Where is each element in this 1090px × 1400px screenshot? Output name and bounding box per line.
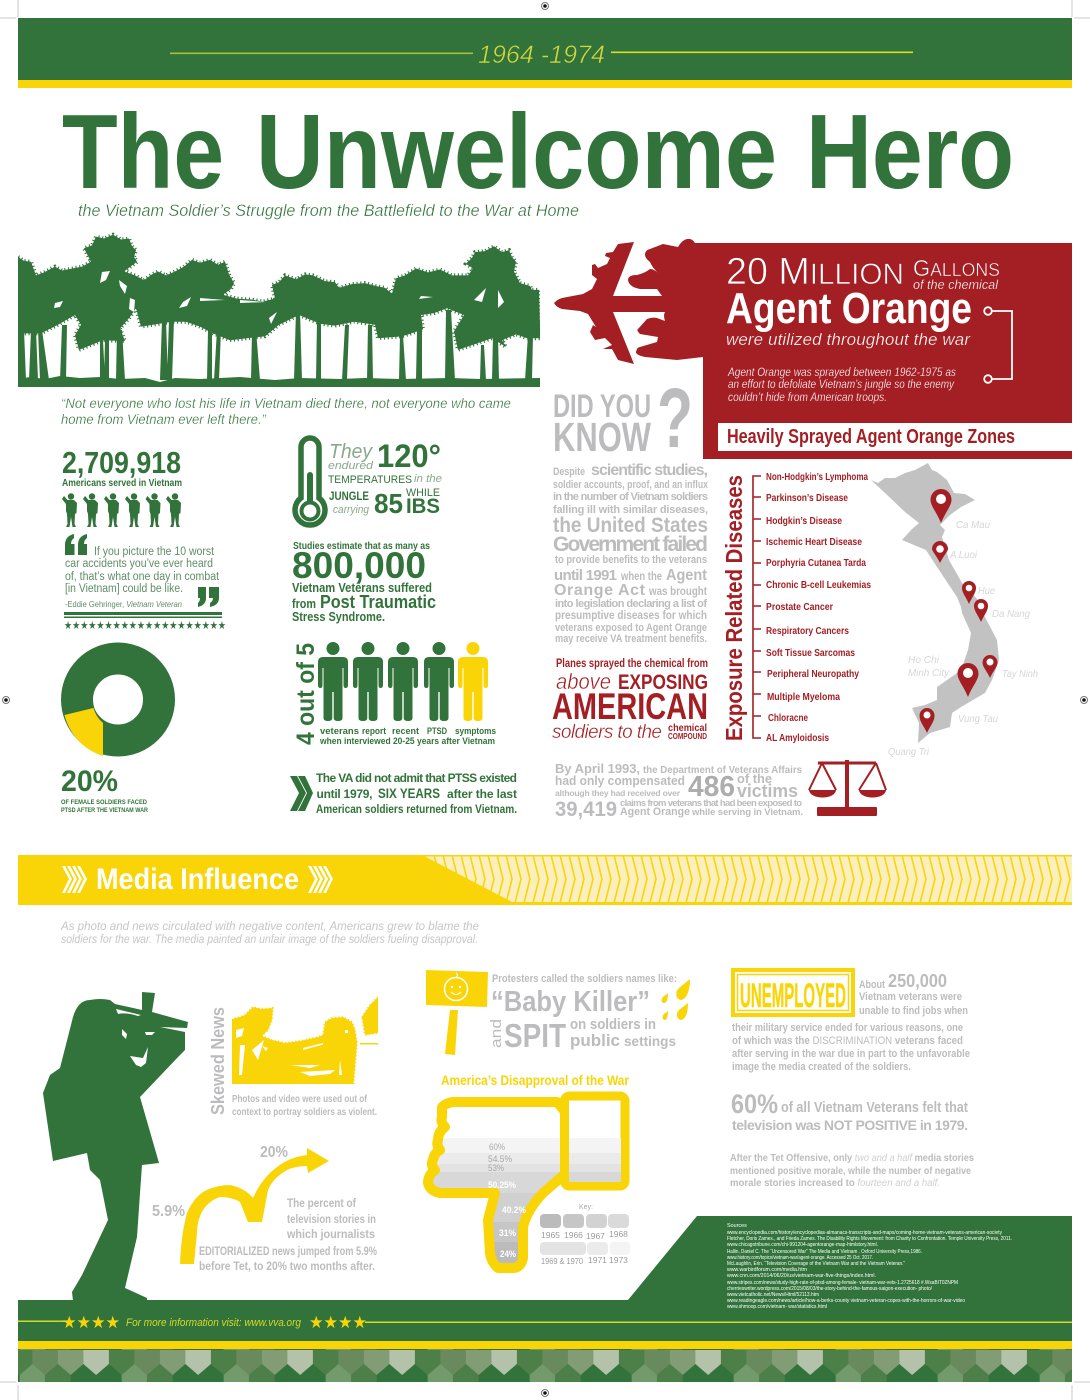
60 percent stat: 60% (731, 1089, 778, 1119)
caption: veterans report symptoms: veterans (320, 726, 359, 737)
unemployment text: after serving in the war due in part to the unfavorable (732, 1048, 970, 1060)
compensation statistics: Agent Orange (620, 806, 690, 818)
stat: americans served: Americans served in Vietnam (62, 478, 182, 489)
agent orange headline: GALLONS (913, 255, 1000, 281)
icon: thermometer (295, 438, 325, 525)
protesters text: settings (624, 1033, 676, 1049)
silhouette: cameraman (43, 992, 188, 1301)
did you know heading: KNOW (553, 414, 651, 460)
thumbs down chart: 60% (489, 1142, 505, 1153)
did you know paragraph: falling ill with similar diseases, (553, 504, 708, 516)
planes exposing american soldiers: above (556, 669, 611, 694)
stat: jungle temperatures: 85 (374, 488, 403, 519)
rising arrow chart (152, 1144, 329, 1264)
unemployment text: About (859, 979, 885, 991)
did you know paragraph: in the number of Vietnam soldiers (553, 491, 708, 503)
compensation statistics: 39,419 (555, 798, 617, 821)
did you know paragraph: Orange Act (554, 582, 646, 599)
diseases bracket (753, 476, 761, 738)
sources list: McLaughlin, Erin. “Television Coverage of the Vietnam War and the Vietnam Veteran.” (727, 1261, 905, 1267)
map place labels: Tay Ninh (1002, 668, 1038, 680)
jungle silhouette (18, 235, 540, 387)
sources list: www.encyclopedia.com/history/encyclopedias-almanacs-transcripts-and-maps/coming-home-vietnam-veterans-american-society (726, 1230, 1002, 1236)
did you know paragraph: when the (620, 571, 662, 583)
planes exposing american soldiers (552, 658, 708, 743)
sources list: Sources (727, 1223, 747, 1229)
media influence banner: Media Influence (96, 863, 299, 896)
caption: veterans report symptoms: recent (392, 726, 420, 737)
planes exposing american soldiers: chemical (668, 723, 707, 734)
stat: jungle temperatures: in the (414, 473, 442, 485)
sources list: www.readingeagle.com/news/article/how-a-berks-county vietnam-veteran-copes-with-the-horrors-of-war-video (726, 1298, 965, 1304)
did you know paragraph: the United States (553, 514, 708, 537)
VA admission text: after the last (447, 787, 517, 801)
thumbs down chart (420, 1096, 625, 1272)
stat: jungle temperatures: TEMPERATURES (328, 474, 412, 486)
diseases list: Non-Hodgkin’s Lymphoma (766, 471, 868, 483)
compensation statistics: while serving in Vietnam. (691, 807, 803, 818)
map place labels: Vung Tau (958, 713, 998, 725)
agent orange headline (726, 251, 1000, 349)
diseases list: AL Amyloidosis (766, 732, 829, 744)
donut stat: PTSD AFTER THE VIETNAM WAR (61, 807, 148, 814)
icon: five veterans (318, 642, 488, 721)
stat: jungle temperatures: They (329, 441, 373, 463)
editorialized text: television stories in (287, 1214, 376, 1226)
footer link with stars (62, 1313, 367, 1333)
chart key: 1969 & 1970 (541, 1256, 583, 1266)
chart key: 1973 (609, 1255, 628, 1265)
editorialized text (199, 1198, 377, 1273)
diseases list: Parkinson’s Disease (766, 492, 848, 504)
stat: jungle temperatures: IBS (406, 495, 440, 518)
did you know heading: DID YOU (553, 388, 651, 424)
veteran quote block: car accidents you’ve ever heard (65, 558, 213, 570)
veteran quote block: If you picture the 10 worst (94, 546, 215, 558)
footer link with stars: For more information visit: www.vva.org (126, 1317, 302, 1329)
sources list: Hallin, Daniel C. The “Uncensored War” The Media and Vietnam . Oxford University Press,1986. (727, 1249, 922, 1255)
thumbs down chart: 54.5% (488, 1154, 512, 1165)
agent orange headline: Agent Orange (726, 284, 972, 333)
unemployment text: their military service ended for various reasons, one (732, 1022, 963, 1034)
chart key: Key: (579, 1204, 593, 1211)
diseases list: Porphyria Cutanea Tarda (766, 557, 866, 569)
tet offensive text: mentioned positive morale, while the number of negative (730, 1165, 971, 1177)
yellow news photo (232, 997, 378, 1090)
protesters text: and (488, 1019, 505, 1048)
thumbs down chart: 31% (499, 1228, 516, 1239)
rising arrow chart: 20% (260, 1144, 288, 1161)
thumbs down chart: 53% (488, 1163, 504, 1174)
chart key: 1968 (609, 1229, 628, 1239)
agent orange headline: of the chemical (913, 277, 999, 292)
veteran quote block: [in Vietnam] could be like. (65, 583, 183, 595)
map pins (920, 489, 998, 733)
sources list: www.cnn.com/2014/06/20/us/vietnam-war-five-things/index.html. (726, 1273, 876, 1279)
VA admission text (316, 771, 517, 816)
did you know paragraph: was brought (648, 586, 707, 598)
compensation statistics: claims from veterans that had been exposed to (620, 798, 802, 809)
sources list: www.chicagotribune.com/chi-991204-agentorange-map-htmlstory.html. (726, 1242, 878, 1248)
subtitle: the Vietnam Soldier’s Struggle from the Battlefield to the War at Home (78, 201, 579, 220)
stat: 800,000 PTSD: 800,000 (292, 545, 426, 586)
donut chart (64, 658, 159, 756)
map place labels: Ho Chi (908, 654, 940, 666)
unemployment text: unable to find jobs when (859, 1005, 968, 1017)
protesters text: SPIT (504, 1017, 566, 1054)
chart key: 1967 (586, 1231, 605, 1241)
stat: 800,000 PTSD: Stress Syndrome. (292, 609, 385, 624)
stat: jungle temperatures: carrying (333, 504, 370, 516)
icon: protest sign with baby (426, 970, 488, 1055)
chart title: America’s Disapproval of the War (441, 1073, 630, 1088)
chart key: 1965 (541, 1230, 560, 1240)
60 percent stat (731, 1089, 968, 1133)
did you know paragraph: Agent (666, 567, 708, 584)
photo caption: context to portray soldiers as violent. (232, 1107, 377, 1118)
diseases list: Hodgkin’s Disease (766, 515, 842, 527)
footer band (18, 1216, 1072, 1382)
photo caption (232, 1094, 377, 1118)
icon: scales of justice (809, 760, 886, 816)
title: Hero (806, 93, 1014, 211)
unemployment text: 250,000 (888, 971, 947, 991)
thumbs down chart: 24% (500, 1249, 516, 1260)
header band with date range: 1964 -1974 (478, 41, 605, 69)
compensation statistics: victims (737, 781, 798, 801)
sources list: www.stripes.com/news/study-high-rate-of-ptsd-among-female- vietnam-war-vets-1.2725618 #.WsaBIT0ZNPM (726, 1280, 958, 1286)
did you know paragraph (553, 462, 709, 645)
did you know paragraph: Government failed (553, 533, 708, 556)
stat: jungle temperatures (328, 438, 442, 519)
stat: 800,000 PTSD (292, 540, 436, 624)
map place labels: A Luoi (949, 549, 978, 561)
caption: veterans report symptoms: when interviewed 20-25 years after Vietnam (319, 736, 495, 747)
rotated label: 4 out of 5: 4 out of 5 (292, 643, 320, 745)
agent orange paragraph (727, 367, 956, 404)
veteran quote block: of, that’s what one day in combat (65, 571, 220, 583)
map place labels (888, 519, 1038, 758)
sources list (726, 1223, 1012, 1310)
unemployment text: image the media created of the soldiers. (732, 1061, 911, 1073)
did you know paragraph: veterans exposed to Agent Orange (555, 622, 707, 634)
diseases list: Chronic B-cell Leukemias (766, 579, 871, 591)
diseases list: Multiple Myeloma (767, 691, 840, 703)
chart key (540, 1204, 630, 1266)
veteran quote block (64, 534, 226, 632)
60 percent stat: television was NOT POSITIVE in 1979. (732, 1117, 968, 1133)
diseases list: Ischemic Heart Disease (766, 536, 862, 548)
protesters text: Protesters called the soldiers names like: (492, 973, 677, 985)
diseases list: Respiratory Cancers (766, 625, 849, 637)
photo caption: Photos and video were used out of (232, 1094, 368, 1105)
tet offensive text: After the Tet Offensive, only two and a half media stories (730, 1152, 974, 1164)
diseases list: Soft Tissue Sarcomas (766, 647, 855, 659)
stat: 800,000 PTSD: Vietnam Veterans suffered (292, 580, 432, 595)
VA admission text: SIX YEARS (378, 786, 440, 801)
did you know paragraph: soldier accounts, proof, and an influx (553, 479, 709, 491)
stat: jungle temperatures: WHILE (406, 487, 440, 499)
caption: veterans report symptoms (319, 726, 496, 747)
map place labels: Quang Tri (888, 746, 930, 758)
unemployment text (732, 971, 970, 1073)
footer link with stars: ★★★★ (309, 1313, 367, 1333)
did you know paragraph: until 1991 (554, 567, 617, 584)
sources list: www.warbirdforum.com/media.htm (726, 1267, 807, 1273)
diseases list: Chloracne (768, 712, 808, 724)
veteran quote block: ★★★★★★★★★★★★★★★★★★★★ (64, 619, 226, 632)
stat: americans served: 2,709,918 (62, 445, 181, 480)
sources list: Fletcher, Doris Zames., and Frieda Zames. The Disability Rights Movement: from Charity to Confrontation. Temple University Press, 2011. (727, 1236, 1012, 1242)
media intro text (60, 921, 479, 946)
agent orange paragraph: Agent Orange was sprayed between 1962-1975 as (727, 367, 956, 379)
map place labels: Ca Mau (956, 519, 990, 531)
unemployment text: Vietnam veterans were (859, 991, 962, 1003)
agent orange paragraph: couldn’t hide from American troops. (728, 392, 887, 404)
footer link with stars: ★★★★ (62, 1313, 120, 1333)
did you know heading: ? (657, 371, 693, 465)
thumbs down chart: 40.2% (502, 1205, 526, 1216)
editorialized text: before Tet, to 20% two months after. (199, 1261, 375, 1273)
stat: 800,000 PTSD: Studies estimate that as many as (293, 540, 430, 552)
map place labels: Hue (978, 585, 995, 597)
zones heading bar: Heavily Sprayed Agent Orange Zones (727, 426, 1015, 448)
protesters text: on soldiers in (570, 1016, 656, 1033)
jungle quote: home from Vietnam ever left there.” (61, 412, 266, 427)
compensation statistics: 486 (688, 771, 735, 803)
agent orange paragraph: an effort to defoliate Vietnam’s jungle so the enemy (728, 379, 955, 391)
jungle quote: “Not everyone who lost his life in Vietnam died there, not everyone who came (61, 396, 511, 411)
icon: spit drops (662, 979, 690, 1020)
did you know paragraph: to provide benefits to the veterans (555, 554, 707, 566)
connector bracket (984, 307, 1012, 383)
stat: 800,000 PTSD: from (292, 596, 316, 611)
compensation statistics: of the (737, 771, 772, 786)
planes exposing american soldiers: soldiers to the (552, 722, 662, 743)
editorialized text: which journalists (286, 1229, 375, 1241)
compensation statistics: had only compensated (555, 773, 685, 788)
sources list: www.vietcatholic.net/News/Html/52113.htm (726, 1292, 819, 1298)
media intro text: soldiers for the war. The media painted an unfair image of the soldiers fueling disapproval. (61, 934, 478, 946)
donut stat: OF FEMALE SOLDIERS FACED (61, 799, 147, 806)
protesters text (488, 973, 677, 1054)
thumbs down chart: 50.25% (488, 1180, 516, 1191)
stat: 800,000 PTSD: Post Traumatic (320, 592, 436, 612)
donut stat: 20% (61, 765, 118, 798)
icon: saluting soldiers (62, 493, 181, 527)
did you know paragraph: into legislation declaring a list of (555, 598, 707, 610)
diseases list heading: Exposure Related Diseases (721, 475, 747, 741)
planes exposing american soldiers: COMPOUND (668, 732, 707, 741)
protesters text: “Baby Killer” (491, 986, 650, 1018)
tet offensive text: morale stories increased to fourteen and a half. (730, 1177, 940, 1189)
stat: jungle temperatures: 120° (377, 438, 441, 474)
rotated heading: skewed news: Skewed News (208, 1007, 228, 1115)
editorialized text: The percent of (287, 1198, 356, 1210)
VA admission text: until 1979, (316, 787, 372, 801)
planes exposing american soldiers: AMERICAN (552, 686, 708, 727)
title: Unwelcome (256, 93, 777, 211)
map place labels: Minh City (908, 667, 950, 679)
title: The (62, 93, 224, 211)
did you know paragraph: scientific studies, (591, 462, 708, 479)
diseases list (766, 471, 871, 744)
caption: veterans report symptoms: PTSD (427, 726, 447, 737)
jungle quote (61, 396, 511, 427)
stat: jungle temperatures: endured (328, 460, 374, 472)
compensation statistics: the Department of Veterans Affairs (643, 764, 802, 776)
did you know paragraph: presumptive diseases for which (555, 608, 707, 622)
media intro text: As photo and news circulated with negative content, Americans grew to blame the (60, 921, 479, 933)
VA admission text: The VA did not admit that PTSS existed (316, 771, 517, 785)
VA admission text: American soldiers returned from Vietnam. (316, 802, 517, 816)
title (62, 93, 1014, 211)
veteran quote block: -Eddie Gehringer, Vietnam Veteran (65, 599, 182, 609)
compensation statistics: although they had received over (555, 788, 681, 798)
protesters text: public (570, 1031, 620, 1050)
agent orange headline: were utilized throughout the war (726, 330, 971, 349)
diseases list: Prostate Cancer (766, 601, 833, 613)
map of vietnam (871, 463, 999, 743)
chart key: 1971 (588, 1255, 607, 1265)
did you know paragraph: Despite (553, 466, 585, 478)
media influence banner (18, 855, 1072, 905)
compensation statistics: By April 1993, (555, 761, 640, 776)
did you know heading (553, 371, 693, 465)
tet offensive text (730, 1152, 974, 1189)
sources list: cherrieswriter.wordpress.com/2015/08/03/the-story-behind-the-famous-saigon-execution- photo/ (727, 1286, 932, 1292)
icon: green chevrons (290, 776, 313, 811)
rising arrow chart: 5.9% (152, 1203, 185, 1220)
header band with date range (18, 18, 1072, 88)
did you know paragraph: may receive VA treatment benefits. (555, 633, 707, 645)
chart key: 1966 (564, 1230, 583, 1240)
60 percent stat: of all Vietnam Veterans felt that (781, 1099, 968, 1116)
sources list: www.history.com/topics/vietnam-war/agent-orange. Accessed 25 Oct. 2017. (726, 1255, 873, 1261)
plane and spray shape (554, 239, 1072, 459)
agent orange headline: 20 MILLION (726, 251, 904, 293)
sources list: www.shmoop.com/vietnam- war/statistics.html (726, 1304, 827, 1310)
editorialized text: EDITORIALIZED news jumped from 5.9% (199, 1246, 377, 1258)
caption: veterans report symptoms: symptoms (455, 726, 496, 737)
compensation statistics (555, 761, 803, 821)
planes exposing american soldiers: EXPOSING (618, 671, 708, 694)
unemployed stamp (731, 968, 855, 1017)
diseases list: Peripheral Neuropathy (767, 668, 859, 680)
infographic canvas: UNEMPLOYED (740, 977, 846, 1015)
planes exposing american soldiers: Planes sprayed the chemical from (556, 658, 708, 670)
unemployment text: of which was the DISCRIMINATION veterans faced (732, 1035, 963, 1047)
caption: veterans report symptoms: report (362, 726, 387, 737)
donut stat (61, 765, 148, 814)
stat: jungle temperatures: JUNGLE (329, 489, 369, 503)
map place labels: Da Nang (992, 608, 1030, 620)
